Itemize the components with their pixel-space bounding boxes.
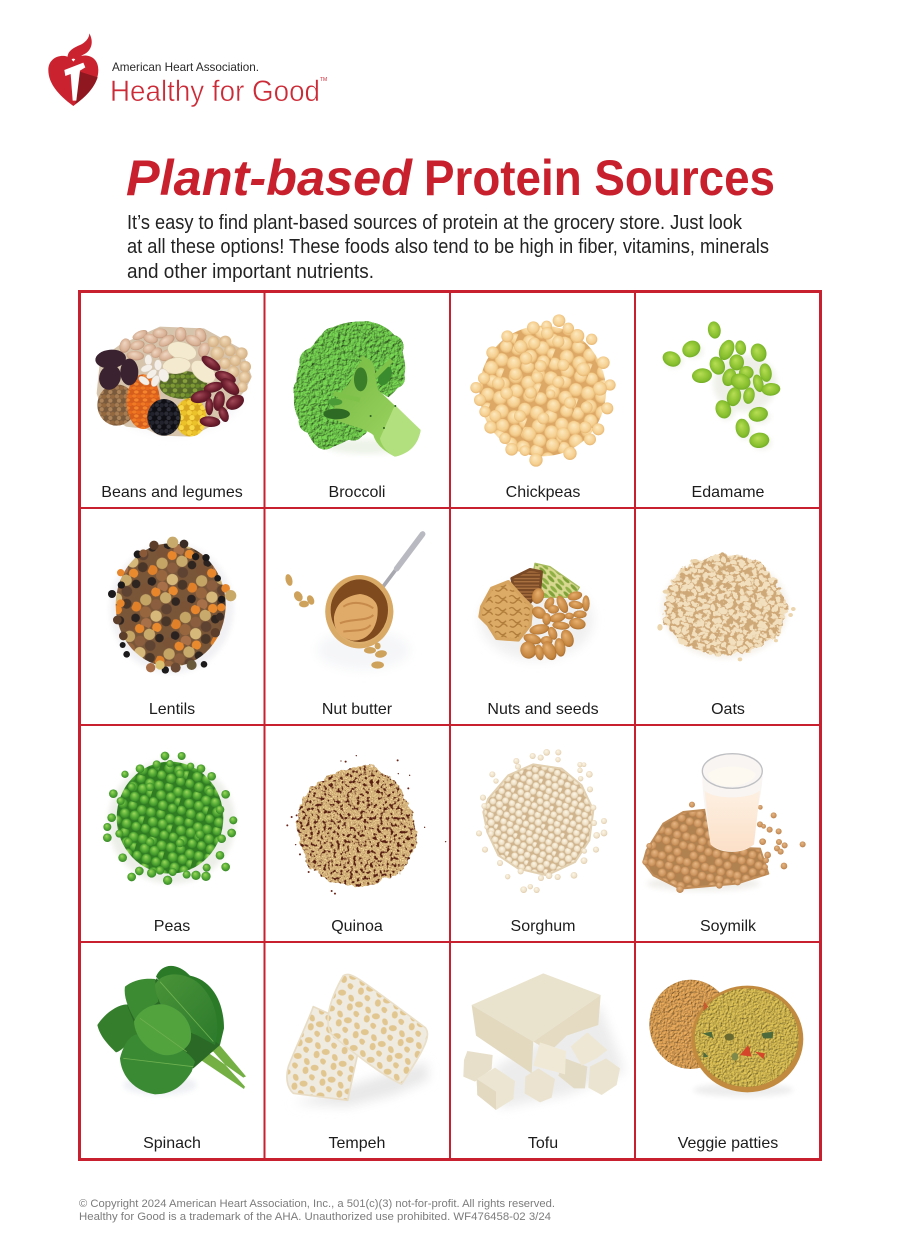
icon: heart and torch	[48, 33, 98, 106]
illustration: lentils	[108, 537, 236, 674]
leaves	[97, 966, 224, 1094]
logo: American Heart Association Healthy for Good	[48, 33, 327, 108]
label: Nut butter	[322, 701, 393, 718]
spoon	[376, 534, 423, 596]
panel: Chickpeas	[470, 314, 616, 501]
title: Protein Sources	[424, 150, 775, 206]
label: Spinach	[143, 1135, 201, 1152]
label: Sorghum	[511, 918, 575, 935]
panel: Oats	[657, 553, 796, 718]
panel: Spinach	[97, 966, 246, 1152]
tofu block	[472, 973, 601, 1073]
panel: Sorghum	[476, 749, 607, 935]
panel: Broccoli	[293, 321, 421, 501]
footer copyright: © Copyright 2024 American Heart Association, Inc., a 501(c)(3) not-for-profit. All rights reserved.	[79, 1198, 555, 1210]
footer copyright: Healthy for Good is a trademark of the AHA. Unauthorized use prohibited. WF476458-02 3/24	[79, 1211, 551, 1223]
panel: Quinoa	[286, 755, 446, 935]
label: Chickpeas	[506, 484, 580, 501]
label: Edamame	[692, 484, 765, 501]
label: Tofu	[528, 1135, 558, 1152]
trademark mark: TM	[320, 77, 327, 83]
illustration: veggie patties	[649, 980, 803, 1097]
illustration: nut butter jar, spoon and peanuts	[284, 534, 423, 670]
illustration: spinach leaves	[97, 966, 246, 1095]
illustration: peas	[103, 752, 237, 885]
panel: Veggie patties	[649, 980, 803, 1152]
soybeans	[642, 802, 806, 893]
panel: Lentils	[108, 537, 236, 718]
illustration: edamame	[660, 320, 781, 449]
illustration: tofu block and cubes	[463, 973, 625, 1110]
panel: Soymilk	[642, 753, 806, 935]
glass of milk	[702, 753, 763, 852]
illustration: oats	[657, 553, 796, 661]
flecks	[703, 1002, 773, 1061]
illustration: tempeh blocks	[287, 974, 428, 1107]
panel: Peas	[103, 752, 237, 935]
label: Oats	[711, 701, 745, 718]
panel: Beans and legumes	[95, 326, 251, 501]
panel: food grid frame	[80, 292, 820, 1160]
illustration: soymilk glass and soybeans	[642, 753, 806, 893]
panel: Nut butter	[284, 534, 423, 718]
text: Healthy for Good: Healthy for Good	[110, 75, 320, 108]
label: Beans and legumes	[101, 484, 243, 501]
illustration: nuts and seeds	[480, 563, 593, 662]
panel: Edamame	[660, 320, 781, 501]
label: Tempeh	[329, 1135, 385, 1152]
label: Quinoa	[331, 918, 383, 935]
label: Lentils	[149, 701, 195, 718]
label: Nuts and seeds	[487, 701, 599, 718]
peanuts	[284, 573, 388, 669]
panel: Tempeh	[287, 974, 428, 1152]
intro text: at all these options! These foods also tend to be high in fiber, vitamins, minerals	[127, 236, 769, 258]
label: Soymilk	[700, 918, 757, 935]
label: Veggie patties	[678, 1135, 778, 1152]
text: American Heart Association: American Heart Association.	[112, 61, 259, 74]
title: Plant-based	[126, 150, 413, 206]
illustration: broccoli	[293, 321, 421, 457]
panel: Nuts and seeds	[480, 563, 599, 718]
intro text: and other important nutrients.	[127, 261, 374, 283]
label: Peas	[154, 918, 190, 935]
label: Broccoli	[329, 484, 385, 501]
illustration: sorghum	[476, 749, 607, 893]
panel: Tofu	[463, 973, 625, 1152]
tofu cubes	[463, 1032, 620, 1110]
stems	[193, 1042, 246, 1089]
intro text: It’s easy to find plant-based sources of protein at the grocery store. Just look	[127, 212, 743, 234]
illustration: beans and legumes	[95, 326, 251, 437]
illustration: chickpeas	[470, 314, 616, 467]
illustration: quinoa	[286, 755, 446, 895]
